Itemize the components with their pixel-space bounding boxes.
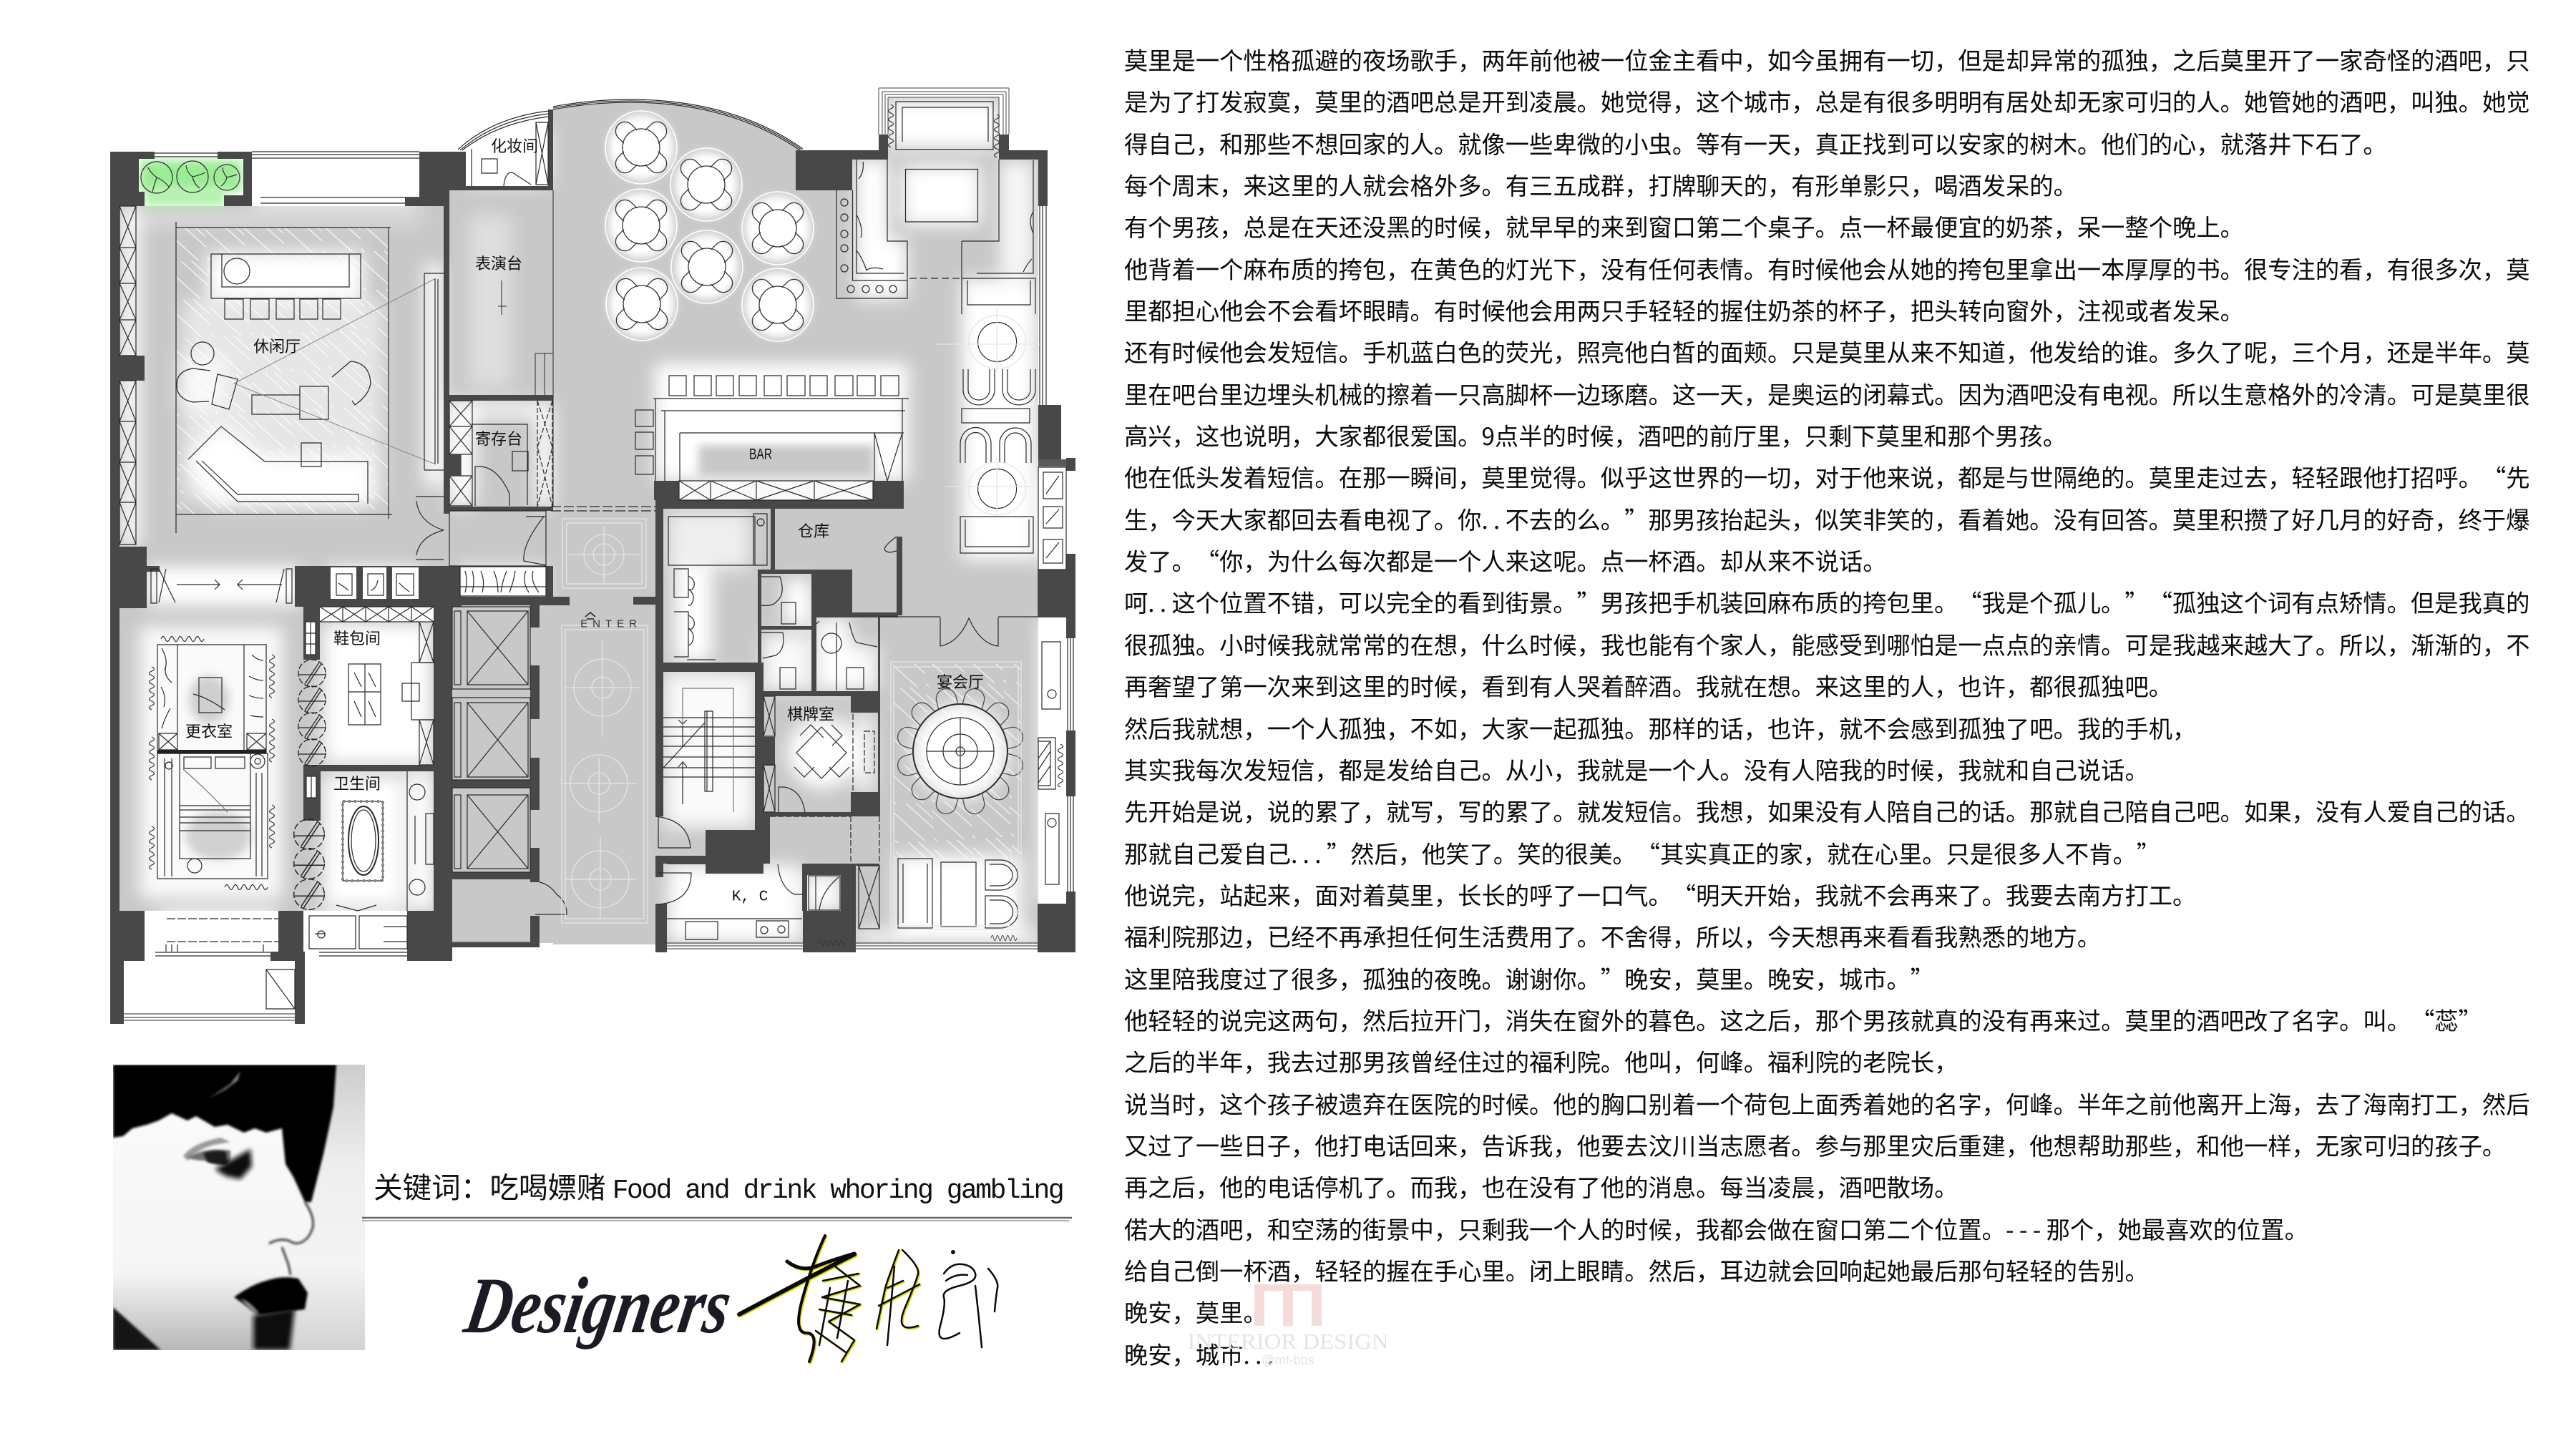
story text: 他轻轻的说完这两句，然后拉开门，消失在窗外的暮色。这之后，那个男孩就真的没有再来过。莫里的酒吧改了名字。叫。“蕊” [1124,1002,2482,1037]
hair highlight [209,1071,240,1098]
story text: 他说完，站起来，面对着莫里，长长的呼了一口气。“明天开始，我就不会再来了。我要去南方打工。 [1124,876,2196,912]
bar [635,376,899,474]
story text: 福利院那边，已经不再承担任何生活费用了。不舍得，所以，今天想再来看看我熟悉的地方。 [1124,918,2101,953]
wardrobe and bed [157,645,266,753]
room labels [185,134,984,906]
story text: 晚安，城市... [1124,1336,1279,1371]
table glows [185,114,874,860]
makeup [472,122,548,186]
walls [110,109,1075,1024]
story text: 很孤独。小时候我就常常的在想，什么时候，我也能有个家人，能感受到哪怕是一点点的亲情。可是我越来越大了。所以，渐渐的，不 [1124,626,2530,661]
floor base [119,97,1038,944]
room labels: 鞋包间 [333,626,381,649]
story text: 其实我每次发短信，都是发给自己。从小，我就是一个人。没有人陪我的时候，我就和自己说话。 [1124,751,2149,786]
architectural linework [119,88,1073,1020]
room labels: 棋牌室 [787,702,834,725]
story text: 之后的半年，我去过那男孩曾经住过的福利院。他叫，何峰。福利院的老院长， [1124,1043,1958,1078]
story text: 呵..这个位置不错，可以完全的看到街景。”男孩把手机装回麻布质的挎包里。“我是个孤儿。”“孤独这个词有点矫情。但是我真的 [1124,584,2529,619]
white niches [155,152,873,798]
room labels: ENTER [580,618,642,630]
outer arcs [553,99,803,150]
divider rule [362,1216,1072,1221]
storage [449,401,527,506]
lips [234,1277,308,1315]
watermark [1188,1284,1388,1367]
planting [140,160,242,206]
room labels: 休闲厅 [253,334,301,357]
story text: 他背着一个麻布质的挎包，在黄色的灯光下，没有任何表情。有时候他会从她的挎包里拿出一本厚厚的书。很专注的看，有很多次，莫 [1124,250,2530,285]
room labels: 寄存台 [475,426,522,449]
story text: 又过了一些日子，他打电话回来，告诉我，他要去汶川当志愿者。参与那里灾后重建，他想帮助那些，和他一样，无家可归的孩子。 [1124,1127,2506,1162]
table groups [605,111,814,341]
jaw shadow [113,1307,161,1350]
bath [343,801,383,881]
story text: 再奢望了第一次来到这里的时候，看到有人哭着醉酒。我就在想。来这里的人，也许，都很孤独吧。 [1124,668,2172,703]
story text [1124,41,2530,1371]
room labels: 卫生间 [333,771,381,794]
soft light glows [122,100,1065,1023]
room labels: BAR [749,446,772,462]
nose line [269,1202,313,1275]
watermark: @mt-bbs [1262,1353,1314,1367]
restroom upper [668,514,767,660]
booths [836,160,1033,298]
background [113,1065,365,1350]
story text: 给自己倒一杯酒，轻轻的握在手心里。闭上眼睛。然后，耳边就会回响起她最后那句轻轻的告别。 [1124,1252,2149,1287]
keyword line: 关键词：吃喝嫖赌 Food and drink whoring gambling [374,1164,1063,1206]
story text: 说当时，这个孩子被遗弃在医院的时候。他的胸口别着一个荷包上面秀着她的名字，何峰。半年之前他离开上海，去了海南打工，然后 [1124,1085,2530,1120]
story text: 那就自己爱自己...”然后，他笑了。笑的很美。“其实真正的家，就在心里。只是很多人不肯。” [1124,835,2160,870]
room labels: 更衣室 [185,719,233,742]
story text: 有个男孩，总是在天还没黑的时候，就早早的来到窗口第二个桌子。点一杯最便宜的奶茶，呆一整个晚上。 [1124,208,2244,243]
stair [663,711,755,804]
story text: 他在低头发着短信。在那一瞬间，莫里觉得。似乎这世界的一切，对于他来说，都是与世隔绝的。莫里走过去，轻轻跟他打招呼。“先 [1124,459,2530,494]
x boxes left [119,206,136,544]
story text: 得自己，和那些不想回家的人。就像一些卑微的小虫。等有一天，真正找到可以安家的树木。他们的心，就落井下石了。 [1124,125,2387,160]
inner mouth [240,1299,260,1315]
story text: 再之后，他的电话停机了。而我，也在没有了他的消息。每当凌晨，酒吧散场。 [1124,1168,1958,1203]
lounge carpet frame [176,222,392,533]
story text: 生，今天大家都回去看电视了。你..不去的么。”那男孩抬起头，似笑非笑的，看着她。没有回答。莫里积攒了好几月的好奇，终于爆 [1124,501,2529,536]
story text: 每个周末，来这里的人就会格外多。有三五成群，打牌聊天的，有形单影只，喝酒发呆的。 [1124,167,2077,202]
signature flourish [737,1234,999,1364]
story text: 里都担心他会不会看坏眼睛。有时候他会用两只手轻轻的握住奶茶的杯子，把头转向窗外，注视或者发呆。 [1124,292,2244,327]
floor plan [110,87,1075,1024]
story text: 莫里是一个性格孤避的夜场歌手，两年前他被一位金主看中，如今虽拥有一切，但是却异常的孤独，之后莫里开了一家奇怪的酒吧，只 [1124,41,2530,77]
lounge door [416,497,546,566]
foyer [551,507,655,511]
room labels: 表演台 [475,251,522,274]
story text: 晚安，莫里。 [1124,1294,1267,1329]
story text: 里在吧台里边埋头机械的擦着一只高脚杯一边琢磨。这一天，是奥运的闭幕式。因为酒吧没有电视。所以生意格外的冷清。可是莫里很 [1124,376,2530,411]
elevators [452,607,530,872]
story text: 偌大的酒吧，和空荡的街景中，只剩我一个人的时候，我都会做在窗口第二个位置。---那个，她最喜欢的位置。 [1124,1211,2308,1246]
story text: 然后我就想，一个人孤独，不如，大家一起孤独。那样的话，也许，就不会感到孤独了吧。我的手机， [1124,710,2196,744]
story text: 发了。“你，为什么每次都是一个人来这呢。点一杯酒。却从来不说话。 [1124,542,1886,577]
hair [113,1065,336,1202]
portrait [113,1065,365,1350]
icon: enter arrow [585,612,595,619]
shoes [348,663,434,725]
K,C [667,919,802,939]
room labels: K, C [732,889,768,906]
face [113,1073,314,1350]
card room [763,696,775,812]
windows [155,152,1073,892]
slide doors [151,569,292,603]
room labels: 仓库 [798,519,829,542]
story text: 高兴，这也说明，大家都很爱国。9点半的时候，酒吧的前厅里，只剩下莫里和那个男孩。 [1124,417,2067,452]
room labels: 化妆间 [491,134,538,157]
eye [183,1138,252,1179]
story text: 还有时候他会发短信。手机蓝白色的荧光，照亮他白皙的面颊。只是莫里从来不知道，他发给的谁。多久了呢，三个月，还是半年。莫 [1124,333,2530,368]
curtains [149,104,1063,946]
neck shadow [253,1308,295,1350]
story text: 先开始是说，说的累了，就写，写的累了。就发短信。我想，如果没有人陪自己的话。那就自己陪自己吧。如果，没有人爱自己的话。 [1124,793,2530,828]
banquet table [895,686,1025,816]
story text: 是为了打发寂寞，莫里的酒吧总是开到凌晨。她觉得，这个城市，总是有很多明明有居处却无家可归的人。她管她的酒吧，叫独。她觉 [1124,83,2530,118]
watermark: INTERIOR DESIGN [1188,1329,1388,1354]
white ceiling and floor pattern lines [562,308,1040,929]
carpet stripes [177,228,1020,859]
banquet doors [879,617,1038,646]
story text: 这里陪我度过了很多，孤独的夜晚。谢谢你。”晚安，莫里。晚安，城市。” [1124,960,1934,995]
room labels: 宴会厅 [937,670,984,693]
